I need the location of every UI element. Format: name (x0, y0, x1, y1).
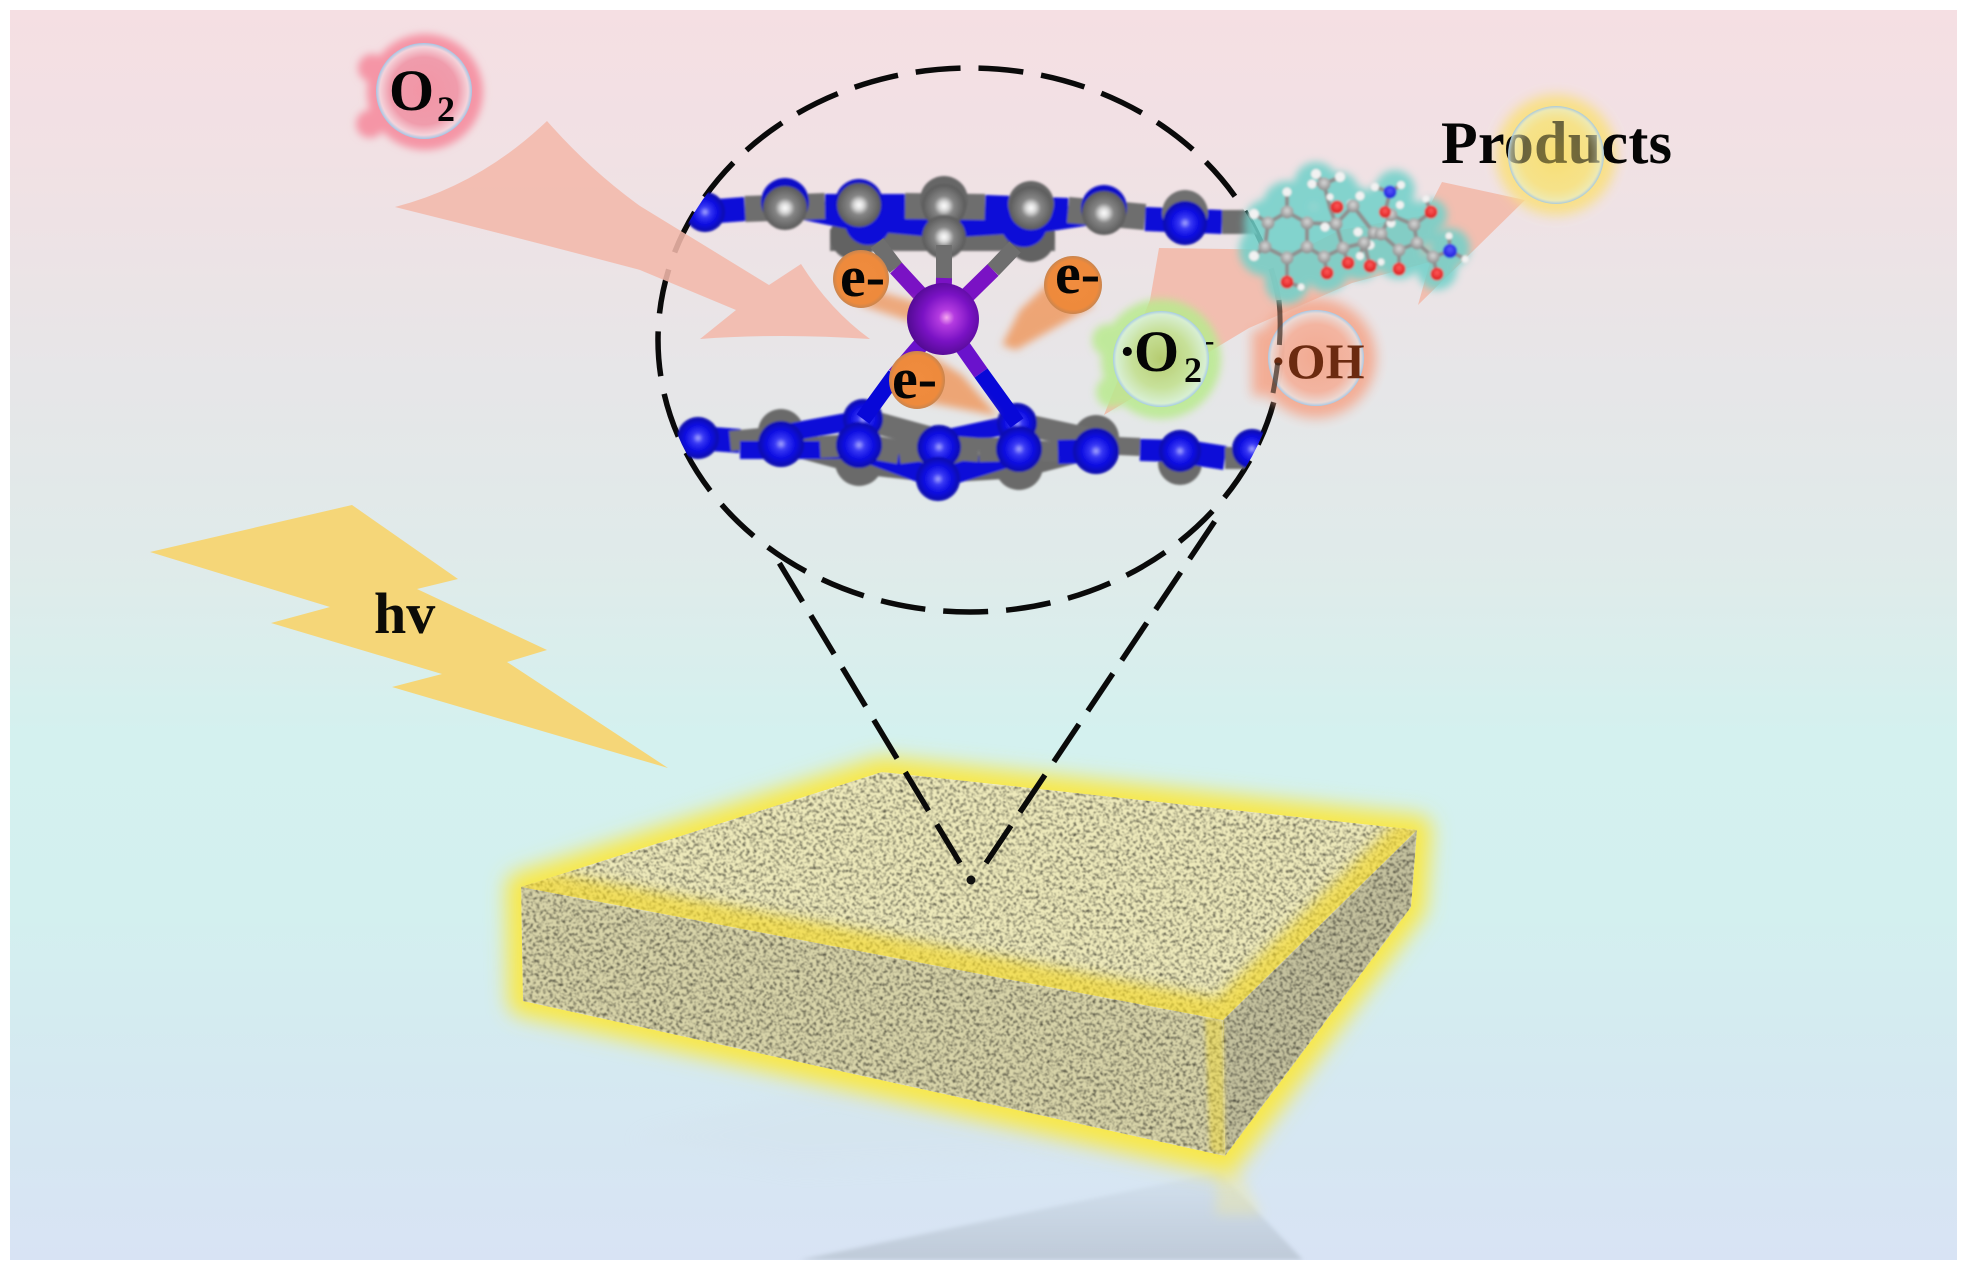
electron 2 (1044, 241, 1102, 314)
bonds (1254, 174, 1465, 287)
slab reflection (808, 1168, 1302, 1260)
magnifier cone (772, 509, 1223, 863)
slab top face (521, 772, 1417, 1020)
slab front face (521, 887, 1225, 1156)
superoxide bubble (1092, 299, 1221, 419)
oxygen atoms (1280, 200, 1444, 288)
hydroxyl radical bubble: ·OH (1270, 333, 1365, 389)
products bubble (1441, 95, 1672, 215)
upper sheet (685, 176, 1290, 262)
O2 bubble: O (389, 58, 434, 123)
electron 3: e- (892, 346, 937, 411)
products bubble: Products (1441, 110, 1672, 176)
label: hv: hv (374, 581, 435, 646)
carbon atoms (1258, 178, 1440, 264)
superoxide bubble: 2 (1184, 350, 1202, 390)
superoxide bubble: · (1118, 321, 1137, 383)
arc of the dashed circle over the hydroxyl bubble (1273, 300, 1280, 393)
hydroxyl radical bubble (1252, 298, 1376, 418)
arrow: to products (1104, 182, 1525, 415)
photocatalyst slab (521, 772, 1417, 1160)
molecular surface (1239, 162, 1470, 304)
pollutant molecule (1239, 162, 1470, 304)
electron tails (860, 280, 1095, 416)
O2 bubble: 2 (437, 89, 455, 129)
electron 2: e- (1055, 241, 1100, 306)
arrow: O2 into active site (395, 121, 870, 339)
electron 1: e- (840, 244, 885, 309)
lightning bolt (150, 505, 668, 768)
dashed magnifier circle (658, 68, 1282, 612)
superoxide bubble: - (1205, 326, 1214, 357)
metal coordination bonds (863, 243, 1017, 423)
O2 bubble (356, 34, 483, 150)
lower sheet (677, 399, 1272, 501)
hydrogen atoms (1249, 169, 1468, 290)
two-dimensional sheets with metal site (677, 176, 1290, 501)
metal atom (907, 283, 979, 355)
slab right face (1223, 830, 1417, 1156)
nitrogen atoms (1384, 186, 1457, 258)
focus dot (966, 876, 976, 884)
superoxide bubble: O (1134, 319, 1179, 384)
